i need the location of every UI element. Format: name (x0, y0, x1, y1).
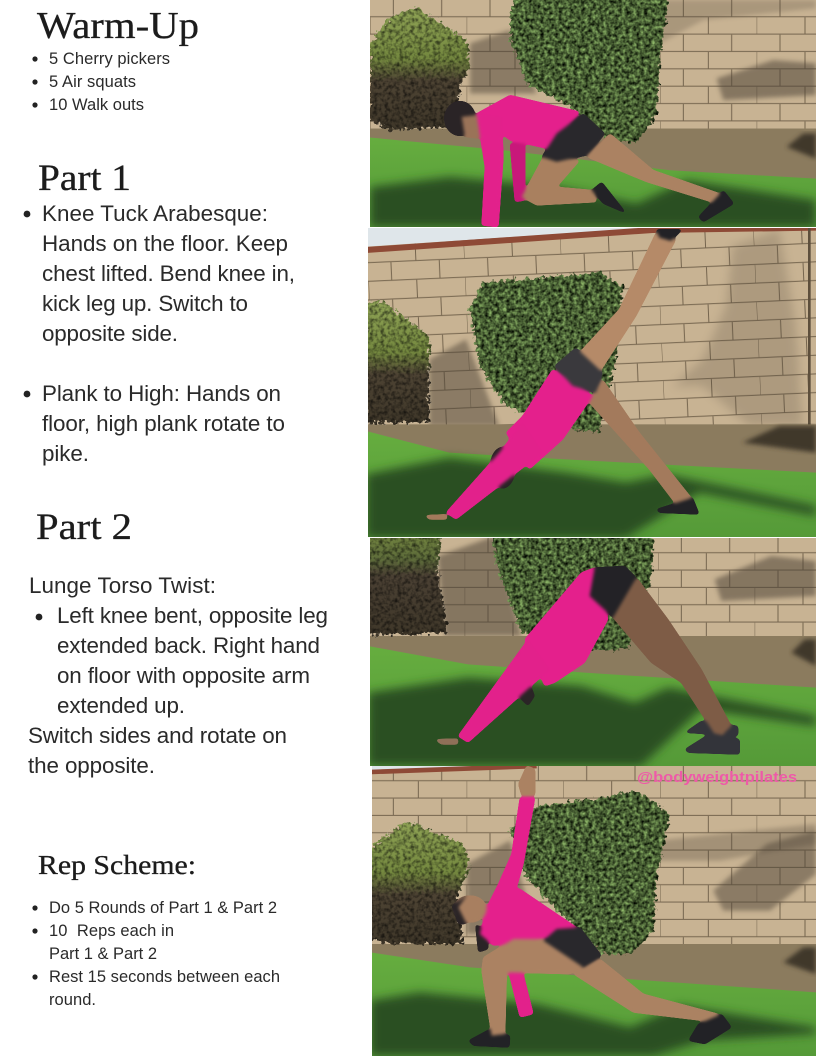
bushes (366, 273, 623, 433)
text: Part 2 exercise: on floor with opposite arm (57, 663, 310, 688)
text: Part 2 exercise: the opposite. (28, 753, 155, 778)
text: Part 1 exercises: Knee Tuck Arabesque: (42, 201, 268, 226)
grass (368, 646, 816, 766)
list: warm-up moves: 5 Cherry pickers (49, 50, 170, 68)
photo 3: lunge pike (370, 538, 816, 766)
list: warm-up moves: 10 Walk outs (49, 96, 144, 114)
bushes (361, 526, 655, 649)
heading: Rep Scheme: Rep Scheme: (38, 850, 196, 880)
text: Part 1 exercises: Hands on the floor. Keep (42, 231, 288, 256)
bushes (370, 0, 670, 142)
text: Part 1 exercises: pike. (42, 441, 89, 466)
text: Part 1 exercises: floor, high plank rotate to (42, 411, 285, 436)
text: Part 1 exercises: opposite side. (42, 321, 178, 346)
text: Part 2 exercise: extended up. (57, 693, 185, 718)
photo 4: torso twist (372, 766, 816, 1056)
list: rep scheme: Part 1 & Part 2 (49, 945, 157, 963)
list: warm-up moves (32, 50, 170, 114)
heading: Warm-Up: Warm-Up (37, 5, 199, 47)
text: Part 1 exercises: Plank to High: Hands on (42, 381, 281, 406)
list: rep scheme: 10 Reps each in (49, 922, 174, 940)
list: warm-up moves: 5 Air squats (49, 73, 136, 91)
figure (424, 229, 699, 519)
text: Part 2 exercise: Switch sides and rotate on (28, 723, 287, 748)
photo 1: knee tuck (370, 0, 816, 227)
list: rep scheme: Do 5 Rounds of Part 1 & Part 2 (49, 899, 277, 917)
photo 2: arabesque kick (368, 228, 816, 537)
text: Part 1 exercises: kick leg up. Switch to (42, 291, 248, 316)
text: Part 2 exercise: Left knee bent, opposite leg (57, 603, 328, 628)
figure (444, 95, 734, 227)
heading: Part 2: Part 2 (36, 507, 132, 548)
text: Part 1 exercises (24, 201, 295, 466)
text: Part 2 exercise: extended back. Right hand (57, 633, 320, 658)
grass (366, 431, 816, 538)
grass (370, 952, 816, 1056)
text: Part 2 exercise: Lunge Torso Twist: (29, 573, 216, 598)
watermark: @bodyweightpilates: @bodyweightpilates (637, 769, 797, 786)
list: rep scheme (32, 899, 280, 1009)
list: rep scheme: Rest 15 seconds between each (49, 968, 280, 986)
text: Part 2 exercise (28, 573, 328, 778)
list: rep scheme: round. (49, 991, 96, 1009)
figure (435, 566, 740, 754)
heading: Part 1: Part 1 (38, 158, 131, 199)
bushes (370, 791, 670, 954)
grass (370, 138, 816, 227)
figure (452, 766, 732, 1047)
text: Part 1 exercises: chest lifted. Bend knee in, (42, 261, 295, 286)
